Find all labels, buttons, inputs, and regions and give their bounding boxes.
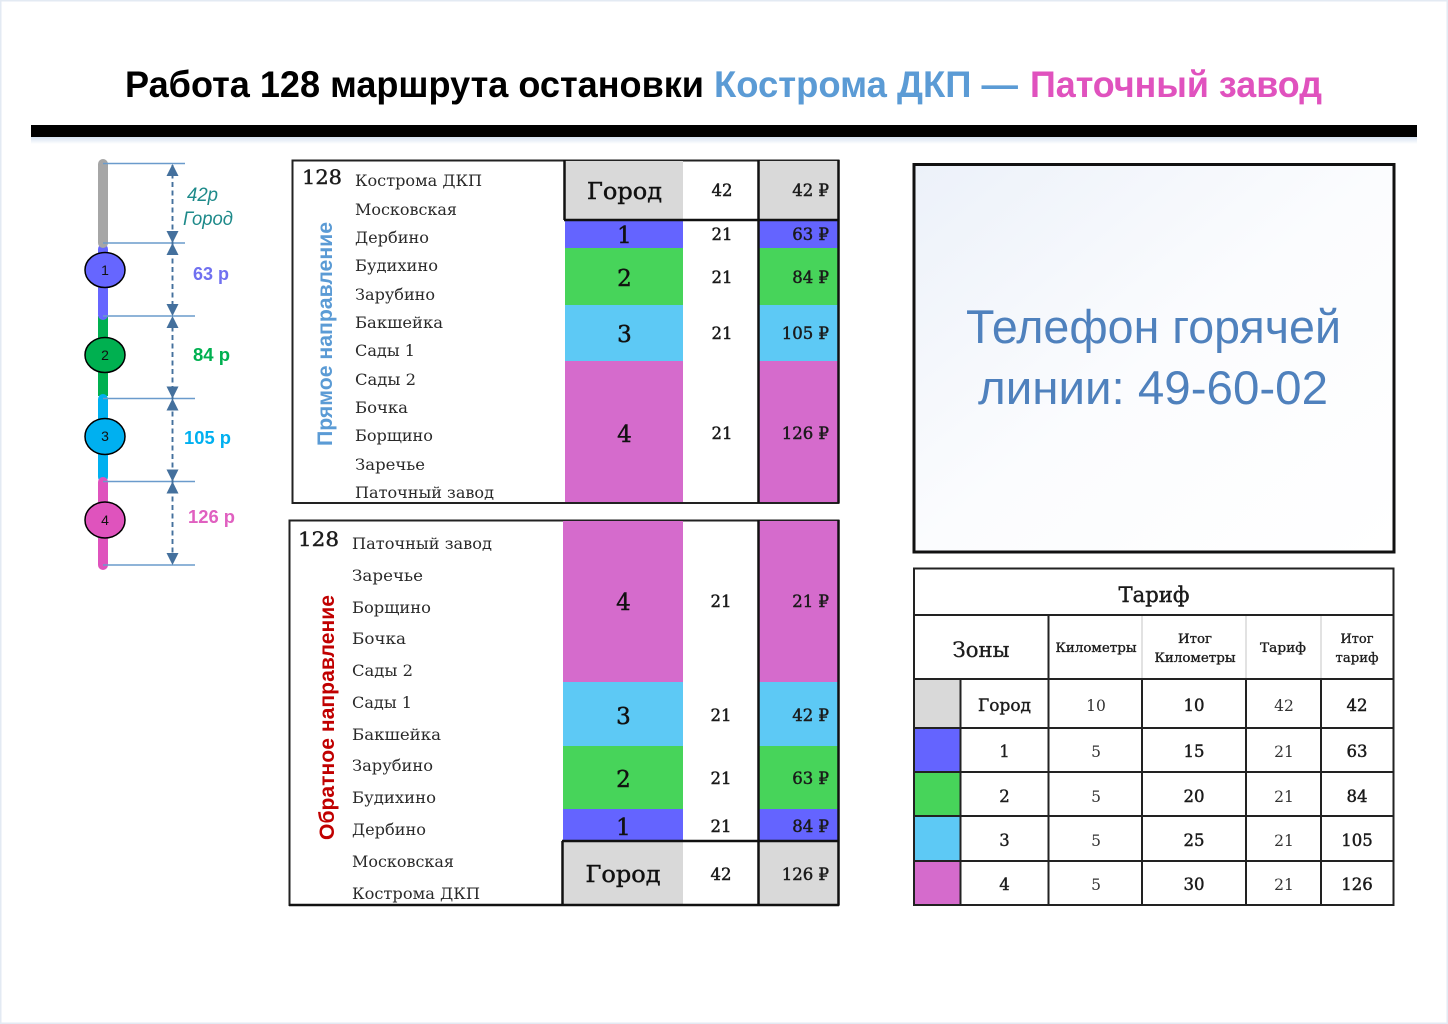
stop marker 2 <box>85 338 125 372</box>
zone labels: return: 3 <box>616 704 631 730</box>
total kilometres column: 25 <box>1184 831 1204 850</box>
zone labels: return <box>586 590 660 888</box>
zone fares: return <box>710 592 732 884</box>
stop marker 3 <box>85 418 125 454</box>
total tariff column: 63 <box>1346 742 1368 761</box>
stop list: forward: Будихино <box>355 257 438 275</box>
title: Работа 128 маршрута остановки <box>125 64 704 105</box>
zone fares: return: 21 <box>710 769 732 788</box>
stop list: return: Сады 1 <box>352 694 412 712</box>
total tariff column: 126 <box>1341 875 1373 894</box>
tariff column: 21 <box>1274 788 1294 806</box>
tariff column: 21 <box>1274 832 1294 850</box>
cumulative fares: return <box>782 592 829 884</box>
zone colour bands <box>289 520 839 905</box>
stop list: return: Бакшейка <box>352 726 441 744</box>
stop list: forward <box>355 172 494 502</box>
panel: forward direction table <box>292 160 839 503</box>
panel: return direction table <box>289 520 839 905</box>
zone fares: forward: 21 <box>712 268 732 287</box>
zone fares: forward <box>712 181 732 443</box>
total tariff column: 105 <box>1341 831 1373 850</box>
stop list: return: Борщино <box>352 599 431 617</box>
table grid <box>914 568 1394 905</box>
zone labels: return: 1 <box>616 815 631 841</box>
stop list: forward: Борщино <box>355 427 433 445</box>
stop list: return: Московская <box>352 853 454 871</box>
stop list: forward: Бакшейка <box>355 314 443 332</box>
route number: 128 <box>298 527 339 551</box>
cumulative fares: return: 126 ₽ <box>782 865 829 884</box>
fare label: city: Город <box>183 209 233 230</box>
zone names: 3 <box>999 831 1010 850</box>
zone labels: forward: 4 <box>617 422 632 448</box>
zone labels: forward: 1 <box>617 223 632 249</box>
total kilometres column: 20 <box>1184 787 1204 806</box>
stop marker 1 <box>85 252 125 288</box>
hotline text <box>966 300 1341 414</box>
stop list: return: Сады 2 <box>352 662 413 680</box>
zone fares: forward: 21 <box>712 324 732 343</box>
total tariff column <box>1341 696 1373 894</box>
stop list: forward: Бочка <box>355 399 408 417</box>
stop marker 4: 4 <box>101 512 109 528</box>
title: Кострома ДКП — <box>714 64 1018 105</box>
stop list: forward: Сады 1 <box>355 342 415 360</box>
tariff column: 21 <box>1274 876 1294 894</box>
route number: 128 <box>302 165 342 189</box>
stop marker 1: 1 <box>101 262 109 278</box>
route line <box>98 159 108 570</box>
column headers <box>952 632 1378 666</box>
tariff column <box>1274 697 1294 894</box>
zone fares: return: 42 <box>710 865 732 884</box>
stop list: forward: Заречье <box>355 456 425 474</box>
stop list: return <box>352 535 492 903</box>
zone labels: forward: 2 <box>617 266 632 292</box>
zone names: 2 <box>999 787 1010 806</box>
fare label: city <box>183 185 233 230</box>
panel: hotline <box>914 164 1394 552</box>
stop list: return: Зарубино <box>352 757 433 775</box>
stop list: forward: Кострома ДКП <box>355 172 482 190</box>
cumulative fares: forward: 63 ₽ <box>792 225 829 244</box>
hotline text: Телефон горячей <box>966 300 1341 353</box>
distance markers <box>103 164 195 565</box>
stop list: return: Дербино <box>352 821 426 839</box>
cumulative fares: return: 42 ₽ <box>792 706 829 725</box>
cumulative fares: forward: 105 ₽ <box>782 324 829 343</box>
stop list: forward: Дербино <box>355 229 429 247</box>
kilometres column: 5 <box>1091 832 1101 850</box>
zone names: Город <box>978 696 1031 715</box>
cumulative fares: forward: 84 ₽ <box>792 268 829 287</box>
zone names: 4 <box>999 875 1010 894</box>
direction label: return: Обратное направление <box>316 595 339 840</box>
total kilometres column <box>1184 696 1204 894</box>
total tariff column: 84 <box>1346 787 1368 806</box>
panel: tariff table <box>914 568 1394 905</box>
title divider bar <box>31 125 1417 144</box>
column headers: Итог <box>1178 632 1212 647</box>
stop list: return: Паточный завод <box>352 535 492 553</box>
stop list: forward: Паточный завод <box>355 484 494 502</box>
zone labels: return: 2 <box>616 767 631 793</box>
zone labels: return: Город <box>586 862 660 888</box>
column headers: Зоны <box>952 638 1010 662</box>
kilometres column: 10 <box>1086 697 1106 715</box>
fare label: 126: 126 р <box>188 507 235 527</box>
route diagram <box>85 159 235 570</box>
zone fares: return: 21 <box>710 592 732 611</box>
cumulative fares: forward: 42 ₽ <box>792 181 829 200</box>
stop list: forward: Зарубино <box>355 286 435 304</box>
kilometres column: 5 <box>1091 876 1101 894</box>
cumulative fares: forward: 126 ₽ <box>782 424 829 443</box>
fare label: 63: 63 р <box>193 264 229 284</box>
zone fares: forward: 21 <box>712 424 732 443</box>
column headers: Тариф <box>1260 641 1306 656</box>
title <box>125 64 1322 105</box>
hotline text: линии: 49-60-02 <box>978 361 1328 414</box>
fare label: 105: 105 р <box>184 428 231 448</box>
zone fares: return: 21 <box>710 817 732 836</box>
stop list: forward: Сады 2 <box>355 371 416 389</box>
zone names <box>978 696 1031 894</box>
total kilometres column: 15 <box>1184 742 1204 761</box>
cumulative fares: return: 84 ₽ <box>792 817 829 836</box>
cumulative fares: return: 63 ₽ <box>792 769 829 788</box>
tariff column: 21 <box>1274 743 1294 761</box>
total tariff column: 42 <box>1346 696 1368 715</box>
zone colour bands <box>564 160 839 503</box>
cumulative fares: forward <box>782 181 829 443</box>
title: Паточный завод <box>1030 64 1322 105</box>
zone labels: forward: Город <box>587 179 662 205</box>
kilometres column <box>1086 697 1106 894</box>
zone labels: forward: 3 <box>617 322 632 348</box>
stop marker 3: 3 <box>101 428 109 444</box>
stop list: return: Кострома ДКП <box>352 885 480 903</box>
zone fares: forward: 21 <box>712 225 732 244</box>
zone labels: forward <box>587 179 662 448</box>
total kilometres column: 10 <box>1184 696 1204 715</box>
kilometres column: 5 <box>1091 743 1101 761</box>
stop list: forward: Московская <box>355 201 457 219</box>
total kilometres column: 30 <box>1184 875 1204 894</box>
zone fares: forward: 42 <box>712 181 732 200</box>
column headers: Километры <box>1154 651 1236 666</box>
stop list: return: Заречье <box>352 567 423 585</box>
stop marker 4 <box>85 502 125 538</box>
fare label: 84: 84 р <box>193 345 230 365</box>
stop list: return: Будихино <box>352 789 436 807</box>
zone fares: return: 21 <box>710 706 732 725</box>
column headers: Километры <box>1056 641 1136 656</box>
column headers: тариф <box>1336 651 1378 666</box>
table title: Тариф <box>1118 583 1190 607</box>
tariff column: 42 <box>1274 697 1294 715</box>
zone swatches <box>914 680 960 905</box>
zone labels: return: 4 <box>616 590 631 616</box>
direction label: forward: Прямое направление <box>314 222 337 446</box>
stop marker 2: 2 <box>101 347 109 363</box>
fare label: city: 42р <box>187 185 218 206</box>
zone names: 1 <box>999 742 1010 761</box>
column headers: Итог <box>1340 632 1374 647</box>
stop list: return: Бочка <box>352 630 406 648</box>
kilometres column: 5 <box>1091 788 1101 806</box>
cumulative fares: return: 21 ₽ <box>792 592 829 611</box>
